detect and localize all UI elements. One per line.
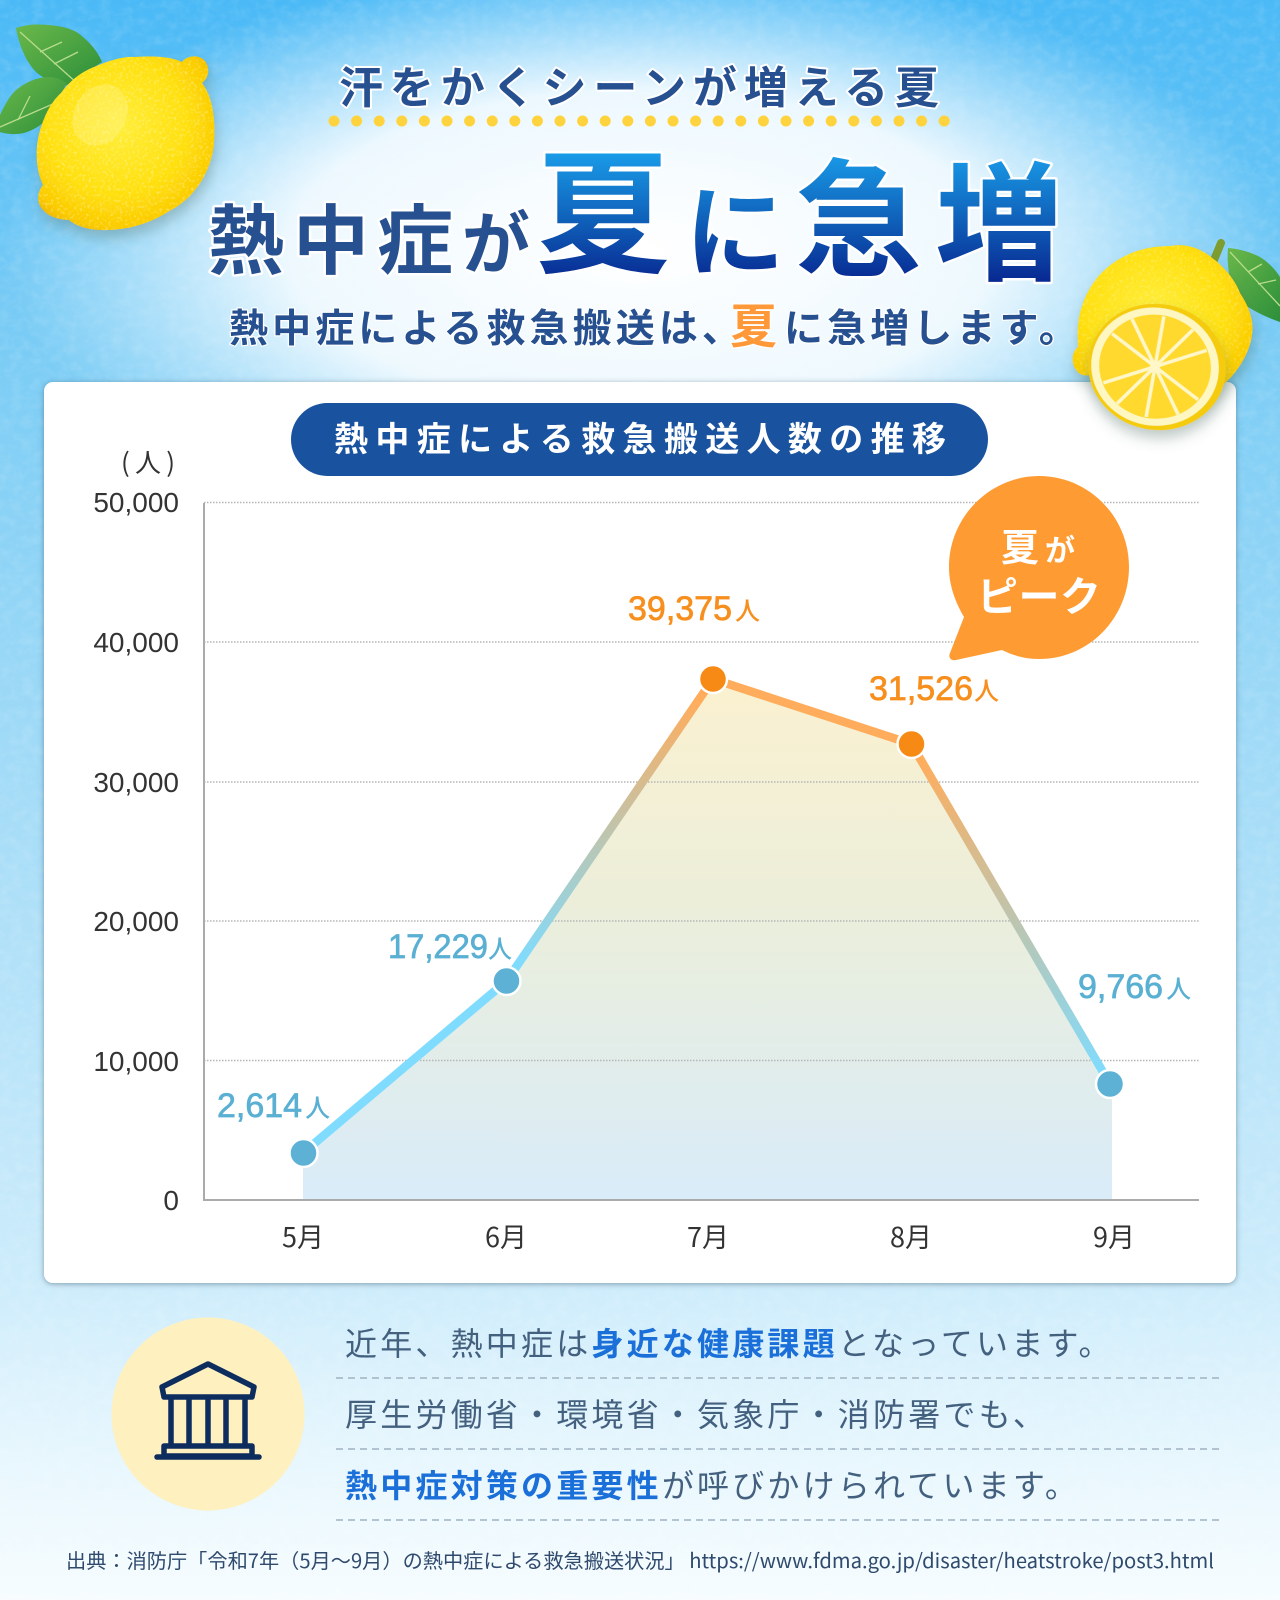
- y axis labels: 10,000: [93, 1046, 179, 1077]
- main title: 中: [293, 180, 369, 290]
- source note: 出典：消防庁「令和7年（5月～9月）の熱中症による救急搬送状況」 https://www.fdma.go.jp/disaster/heatstroke/post3.html: [66, 1545, 1214, 1574]
- chart heading pill: 熱中症による救急搬送人数の推移: [334, 412, 946, 461]
- callout: summer peak: 夏: [1001, 517, 1039, 572]
- illustration: lemon with leaves, top left: [0, 24, 214, 230]
- y axis labels: [93, 443, 179, 1216]
- main title: 増: [935, 122, 1063, 307]
- main title: に: [685, 152, 785, 297]
- stem: [1214, 243, 1221, 260]
- lemon: [37, 56, 214, 230]
- illustration: lemon and slice, right: [1073, 243, 1280, 441]
- main title: 症: [377, 180, 453, 290]
- x axis labels: 7月: [687, 1216, 729, 1255]
- main title: 熱: [208, 180, 284, 290]
- callout: summer peak: が: [1045, 526, 1075, 570]
- gridlines and axes: [204, 502, 1199, 1200]
- text block: summary: [336, 1319, 1224, 1520]
- leaf: [1228, 248, 1280, 322]
- subtitle: 熱中症による救急搬送は、: [229, 298, 745, 354]
- main title: [208, 107, 1063, 307]
- line chart: [93, 443, 1199, 1255]
- x axis labels: 5月: [282, 1216, 324, 1255]
- y axis labels: 50,000: [93, 487, 179, 518]
- y axis labels: 30,000: [93, 767, 179, 798]
- heading: eyebrow: 汗をかくシーンが増える夏: [339, 52, 939, 116]
- data labels: 2,614人: [217, 1087, 330, 1125]
- x axis labels: 8月: [890, 1216, 932, 1255]
- callout: summer peak: ピーク: [977, 563, 1101, 623]
- subtitle: 夏: [730, 288, 777, 357]
- data labels: 39,375人: [628, 590, 760, 628]
- lemon slice: [1078, 293, 1236, 441]
- line 2: 厚生労働省・環境省・気象庁・消防署でも、: [345, 1390, 1048, 1436]
- y axis labels: 20,000: [93, 906, 179, 937]
- leaf: lower: [0, 77, 67, 134]
- line 3: 熱中症対策の重要性が呼びかけられています。: [345, 1461, 1080, 1507]
- main title: が: [462, 189, 530, 288]
- y axis labels: 0: [163, 1185, 179, 1216]
- data line: [303, 679, 1110, 1153]
- x axis labels: [282, 1216, 1135, 1255]
- dotted underline: [334, 116, 946, 126]
- whole lemon: [1073, 245, 1252, 411]
- main title: 急: [795, 119, 922, 303]
- data points: [290, 665, 1124, 1167]
- area under line: [303, 679, 1112, 1200]
- data labels: 9,766人: [1078, 968, 1191, 1006]
- data labels: 31,526人: [869, 670, 999, 708]
- chart heading pill: [291, 403, 988, 476]
- y axis labels: 40,000: [93, 627, 179, 658]
- subtitle: [229, 288, 1082, 357]
- x axis labels: 6月: [485, 1216, 527, 1255]
- panel: chart card: [44, 382, 1236, 1283]
- leaf: upper: [16, 24, 102, 85]
- main title: 夏: [536, 107, 670, 301]
- y axis labels: (人): [121, 443, 175, 480]
- line 1: 近年、熱中症は身近な健康課題となっています。: [345, 1319, 1114, 1365]
- subtitle: に急増します。: [784, 298, 1082, 354]
- icon: government building: [112, 1318, 304, 1510]
- x axis labels: 9月: [1093, 1216, 1135, 1255]
- data labels: [217, 590, 1191, 1125]
- data labels: 17,229人: [388, 928, 512, 966]
- callout: summer peak: [949, 476, 1129, 660]
